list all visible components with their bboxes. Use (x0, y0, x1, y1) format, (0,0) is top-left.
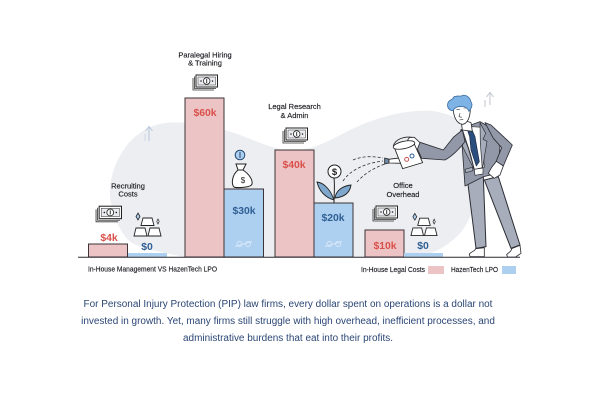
icon: gold bars recruiting (134, 213, 161, 236)
bar: paralegal in-house $60k (185, 98, 224, 257)
label: paralegal hiring and training: Paralegal Hiring (178, 50, 232, 60)
tie (468, 131, 479, 166)
shoes (469, 248, 484, 257)
legend label: HazenTech: HazenTech LPO (451, 265, 498, 274)
legend title: In-House Management VS HazenTech LPO (88, 264, 217, 274)
icon: watering can (385, 137, 423, 169)
bar: overhead in-house $10k (365, 230, 404, 257)
face (453, 105, 470, 124)
value: $0 recruiting: $0 (141, 242, 153, 253)
label: legal research and admin: & Admin (281, 111, 308, 120)
icon: plant with coin (317, 165, 351, 203)
icon: money bag: $ (241, 176, 246, 185)
value: $20k: $20k (321, 213, 345, 224)
icon: plant with coin: $ (332, 167, 338, 178)
value: $0 overhead: $0 (417, 241, 429, 252)
value: $10k: $10k (373, 241, 397, 252)
belt (474, 168, 483, 175)
icon: money bag (232, 150, 252, 188)
hair (448, 95, 472, 111)
paragraph: invested in growth. Yet, many firms still struggle with high overhead, inefficient processes, and (81, 316, 495, 327)
right arm (485, 123, 512, 166)
value: $4k: $4k (100, 233, 118, 244)
value: $40k: $40k (282, 160, 306, 171)
background blob (110, 111, 477, 257)
left hand (408, 137, 420, 152)
bar: overhead HazenTech $0 (404, 253, 443, 257)
neck (461, 119, 472, 131)
paragraph: administrative burdens that eat into their profits. (183, 333, 393, 344)
baseline (78, 256, 520, 258)
paragraph: For Personal Injury Protection (PIP) law firms, every dollar spent on operations is a dollar not (84, 299, 492, 310)
near leg (468, 177, 486, 248)
far leg (484, 177, 520, 248)
shirt (462, 127, 484, 169)
label: office overhead: Overhead (387, 190, 419, 199)
legend label: in-house: In-House Legal Costs (361, 265, 425, 274)
left arm (416, 130, 465, 160)
icon: money paralegal (193, 75, 218, 90)
bar: paralegal HazenTech $30k (224, 189, 264, 257)
jacket body (461, 122, 500, 186)
label: legal research and admin: Legal Research (268, 102, 321, 111)
icon: money recruiting (96, 206, 121, 222)
water stream dashes (343, 157, 385, 182)
icon: money research (283, 128, 308, 143)
icon: gold bars overhead (411, 213, 437, 236)
pocket flap (465, 167, 473, 173)
faint arrow right (485, 92, 494, 107)
label: recruiting costs: Costs (118, 190, 138, 198)
faint arrow left (145, 126, 152, 141)
legend swatch: in-house (428, 266, 444, 274)
label: recruiting costs: Recruiting (111, 182, 145, 190)
icon: money overhead (373, 206, 398, 221)
right hand and cuff (488, 161, 503, 178)
bar: recruiting in-house $4k (88, 244, 128, 257)
label: paralegal hiring and training: & Training (188, 58, 222, 68)
bar: research HazenTech $20k (314, 203, 353, 257)
paragraph (81, 299, 495, 344)
logo mark on $20k bar (325, 242, 342, 246)
lapels (459, 129, 474, 170)
bar: recruiting HazenTech $0 (128, 253, 167, 257)
legend swatch: HazenTech (502, 266, 516, 274)
value: $60k: $60k (193, 108, 217, 119)
bar: research in-house $40k (275, 150, 314, 257)
logo mark on $30k bar (235, 242, 252, 246)
value: $30k: $30k (232, 206, 256, 217)
label: office overhead: Office (393, 181, 413, 190)
illustration: businessman (408, 95, 521, 257)
